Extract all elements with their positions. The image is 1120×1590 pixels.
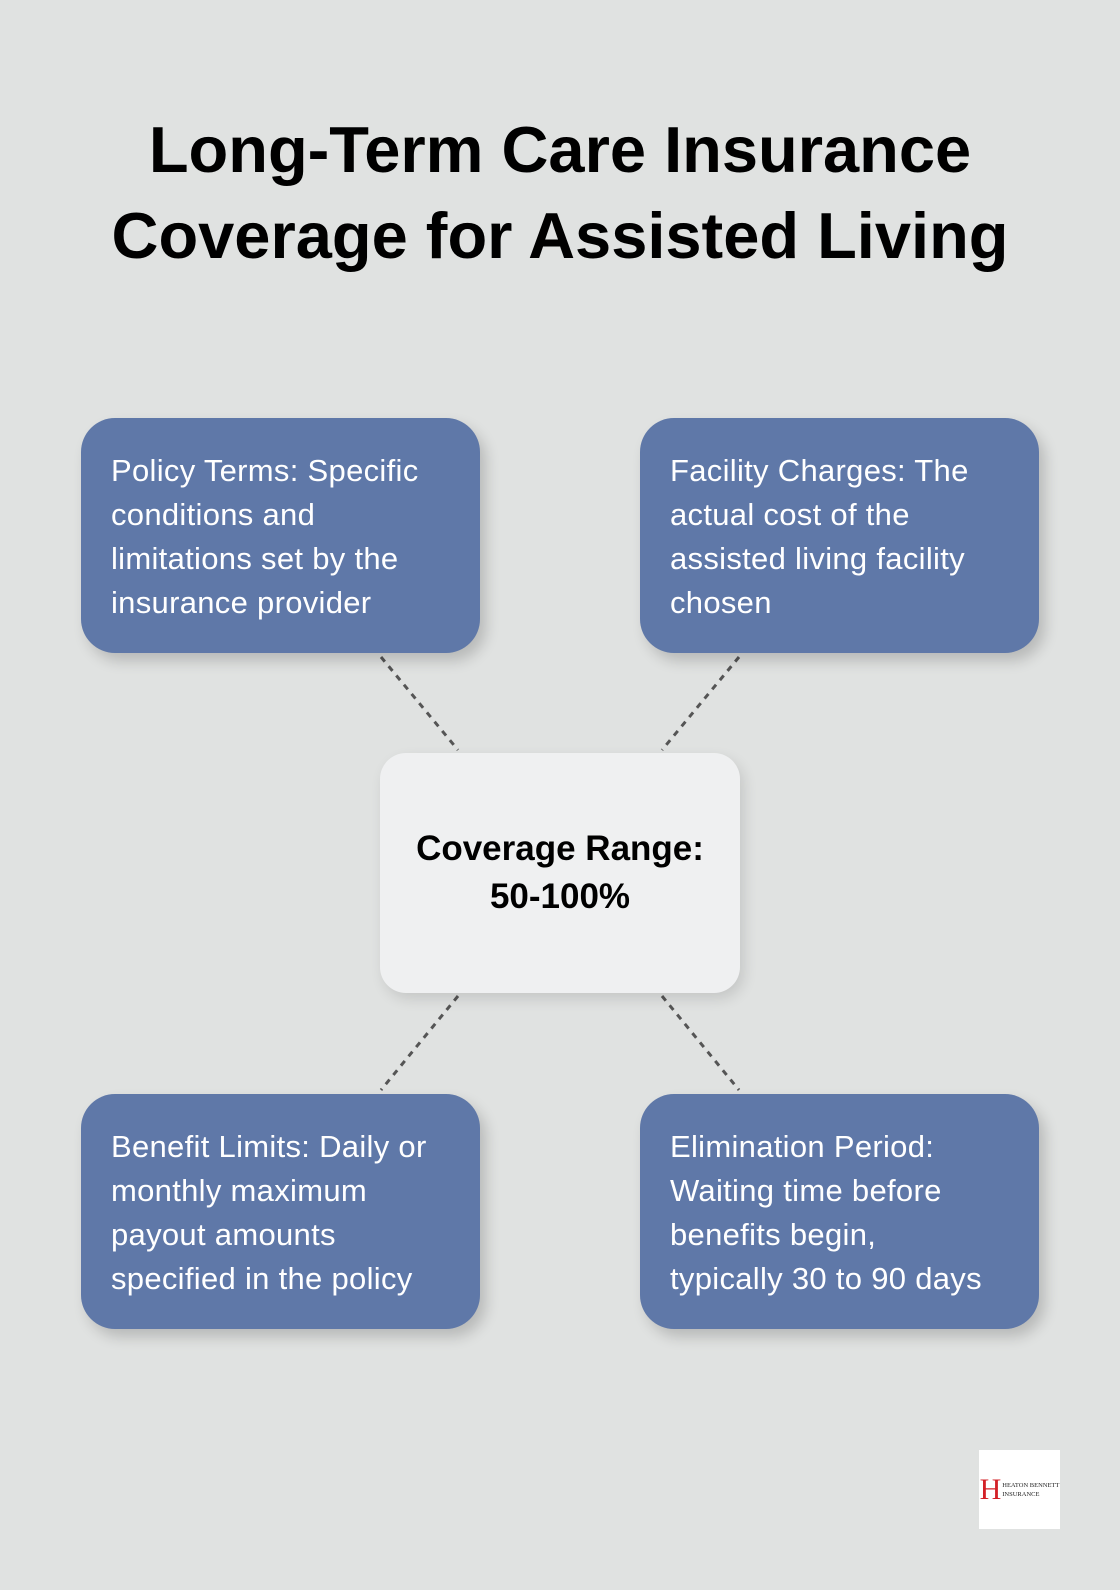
panel: facility charges: assisted living facility — [670, 541, 965, 576]
panel: benefit limits: monthly maximum — [111, 1173, 367, 1208]
panel: benefit limits — [81, 1094, 480, 1329]
panel: elimination period: typically 30 to 90 days — [670, 1261, 982, 1296]
panel: policy terms: limitations set by the — [111, 541, 398, 576]
panel: elimination period: Waiting time before — [670, 1173, 942, 1208]
logo: HEATON BENNETT — [1002, 1482, 1059, 1488]
panel: policy terms: Policy Terms: Specific — [111, 453, 419, 488]
center: coverage range: Coverage Range: — [416, 829, 704, 868]
logo — [979, 1450, 1060, 1529]
title — [112, 113, 1008, 272]
center: coverage range — [380, 753, 740, 993]
panel: facility charges: chosen — [670, 585, 772, 620]
panel: benefit limits: payout amounts — [111, 1217, 336, 1252]
panel: policy terms: conditions and — [111, 497, 315, 532]
panel: facility charges: Facility Charges: The — [670, 453, 969, 488]
logo: INSURANCE — [1002, 1490, 1039, 1498]
panel: policy terms: insurance provider — [111, 585, 371, 620]
panel: benefit limits: Benefit Limits: Daily or — [111, 1129, 427, 1164]
panel: elimination period — [640, 1094, 1039, 1329]
panel: facility charges: actual cost of the — [670, 497, 910, 532]
panel: facility charges — [640, 418, 1039, 653]
panel: benefit limits: specified in the policy — [111, 1261, 413, 1296]
title: Coverage for Assisted Living — [112, 199, 1008, 272]
panel: policy terms — [81, 418, 480, 653]
center: coverage range: 50-100% — [490, 877, 630, 916]
panel: elimination period: Elimination Period: — [670, 1129, 934, 1164]
logo: H — [980, 1472, 1001, 1506]
panel: elimination period: benefits begin, — [670, 1217, 876, 1252]
title: Long-Term Care Insurance — [149, 113, 971, 186]
